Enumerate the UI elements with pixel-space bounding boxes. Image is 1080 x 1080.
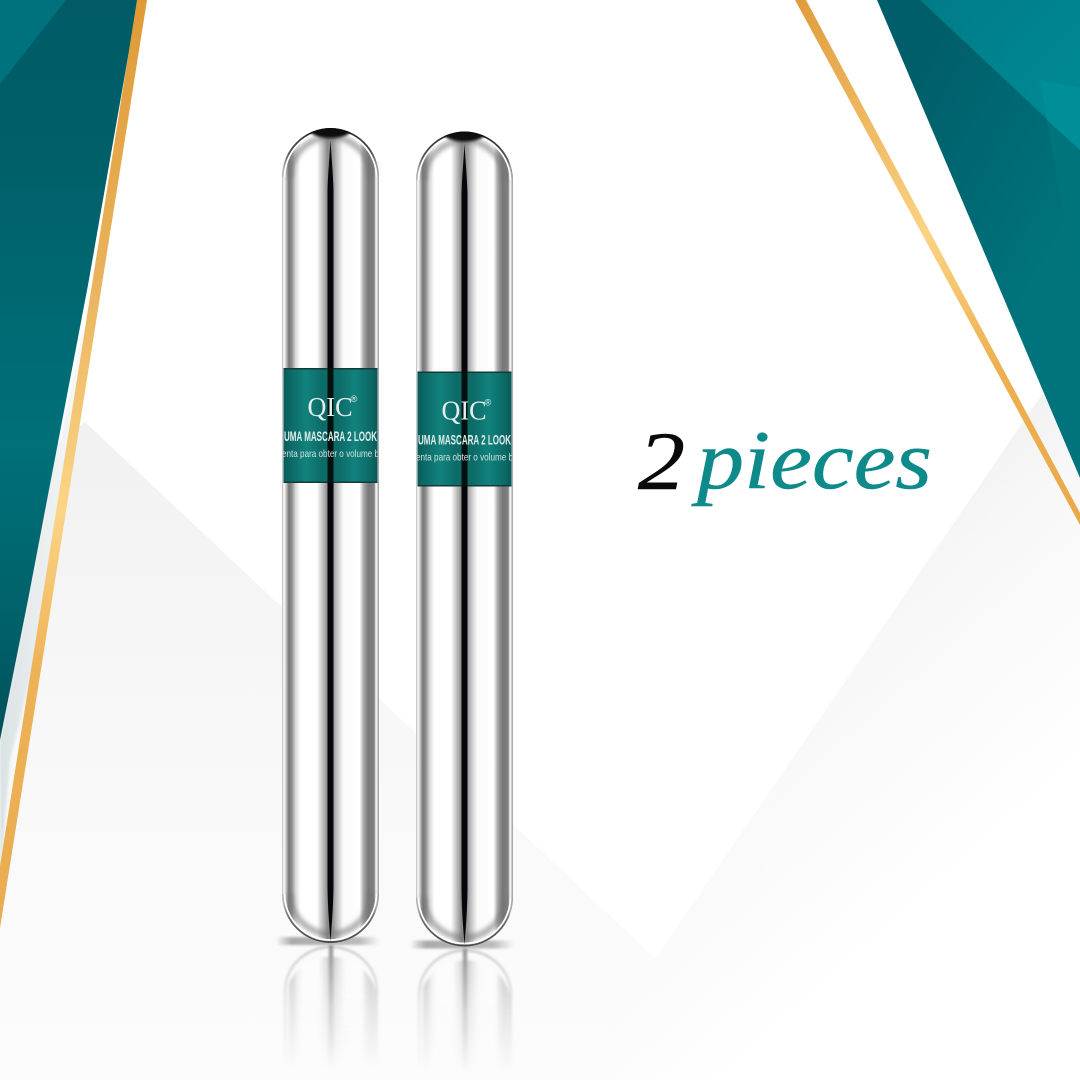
right grey triangle	[572, 393, 1080, 1080]
teal label band	[282, 368, 379, 483]
contact shadow	[410, 940, 514, 948]
chrome body	[416, 126, 513, 946]
product tagline: enta para obter o volume b	[282, 448, 379, 460]
product tagline: enta para obter o volume b	[416, 452, 513, 464]
product name: UMA MASCARA 2 LOOK	[418, 432, 511, 448]
word pieces: pieces	[691, 414, 932, 507]
left teal panel	[0, 0, 138, 740]
product name: UMA MASCARA 2 LOOK	[284, 428, 377, 444]
left gold stripe	[0, 0, 147, 928]
registered mark: ®	[351, 394, 358, 404]
numeral 2: 2	[638, 415, 685, 507]
registered mark: ®	[485, 398, 492, 408]
left grey triangle	[0, 422, 785, 1080]
reflection	[285, 945, 377, 1070]
mascara tube 1	[276, 122, 380, 1070]
right teal panel	[877, 0, 1080, 478]
teal label band	[416, 372, 513, 486]
heading: 2 pieces	[638, 414, 932, 507]
right gold stripe	[795, 0, 1080, 525]
chrome body	[282, 122, 379, 943]
reflection	[419, 948, 511, 1074]
brand name: QIC	[442, 396, 486, 426]
brand name: QIC	[308, 392, 352, 422]
contact shadow	[276, 937, 380, 945]
mascara tube 2	[410, 126, 514, 1074]
left corner shadow strip	[0, 280, 92, 880]
